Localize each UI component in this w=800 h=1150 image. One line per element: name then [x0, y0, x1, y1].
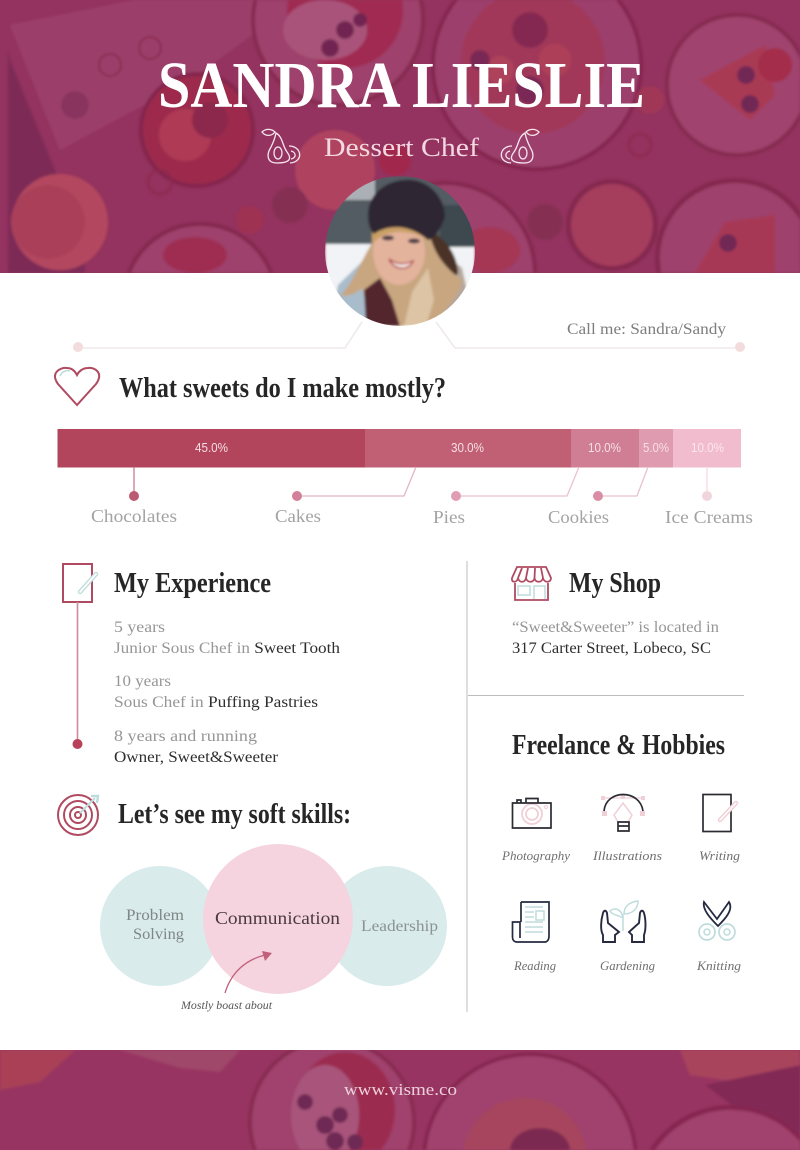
- bar chart legend: Cakes: [275, 506, 321, 526]
- experience list: 5 years: [114, 619, 165, 636]
- experience list: 8 years and running: [114, 728, 257, 745]
- stacked bar chart: 10.0%: [691, 440, 724, 455]
- experience list: [114, 619, 340, 766]
- heading: experience: My Experience: [114, 568, 271, 599]
- bar chart legend: Chocolates: [91, 506, 177, 526]
- icon: shop: [512, 567, 551, 600]
- shop address: “Sweet&Sweeter” is located in: [512, 619, 719, 636]
- stacked bar chart: 45.0%: [195, 440, 228, 455]
- icon: gardening: [601, 901, 646, 942]
- footer photo banner: [0, 1050, 800, 1150]
- soft skills venn: Solving: [133, 926, 184, 943]
- shop address: 317 Carter Street, Lobeco, SC: [512, 640, 711, 657]
- soft skills venn: Communication: [215, 908, 340, 928]
- soft skills venn: Problem: [126, 907, 185, 924]
- hobby labels: Gardening: [600, 958, 655, 973]
- soft skills venn: [100, 844, 447, 994]
- icon: reading: [512, 902, 549, 942]
- shop address: [512, 619, 719, 657]
- icon: left avocado: [262, 129, 300, 163]
- hobby labels: [501, 848, 742, 973]
- icon: heart: [55, 368, 99, 405]
- bar chart legend: Pies: [433, 507, 465, 527]
- heading: hobbies: Freelance & Hobbies: [512, 730, 725, 761]
- call me text: Call me: Sandra/Sandy: [567, 321, 726, 338]
- stacked bar chart: 30.0%: [451, 440, 484, 455]
- icon: right avocado: [501, 129, 539, 163]
- subtitle: Dessert Chef: [324, 133, 479, 162]
- annotation: Mostly boast about: [180, 998, 273, 1012]
- column divider: [467, 561, 744, 1012]
- hobby labels: Illustrations: [592, 848, 662, 863]
- stacked bar chart: [58, 429, 741, 468]
- soft skills venn: Leadership: [361, 918, 438, 935]
- stacked bar chart: 5.0%: [643, 440, 669, 455]
- icon: photography: [512, 798, 551, 828]
- arrow: to communication: [225, 951, 272, 993]
- icon: experience notepad with timeline: [63, 564, 96, 749]
- icon: writing: [703, 794, 736, 832]
- contact connector line: [73, 322, 745, 352]
- icon: knitting: [699, 902, 735, 940]
- heading: soft skills: Let’s see my soft skills:: [118, 799, 351, 830]
- experience list: Junior Sous Chef in Sweet Tooth: [114, 640, 340, 657]
- bar chart legend: Cookies: [548, 507, 609, 527]
- hobby labels: Reading: [513, 958, 556, 973]
- experience list: Owner, Sweet&Sweeter: [114, 749, 279, 766]
- experience list: Sous Chef in Puffing Pastries: [114, 694, 318, 711]
- bar chart legend: Ice Creams: [665, 507, 753, 527]
- footer url: www.visme.co: [344, 1080, 457, 1099]
- heading: shop: My Shop: [569, 568, 661, 599]
- header photo banner: [0, 0, 800, 273]
- hobby labels: Knitting: [696, 958, 742, 973]
- stacked bar chart: 10.0%: [588, 440, 621, 455]
- hobby labels: Writing: [699, 848, 741, 863]
- icon: target: [58, 795, 98, 835]
- experience list: 10 years: [114, 673, 171, 690]
- heading: sweets: What sweets do I make mostly?: [119, 373, 446, 404]
- icon: illustrations: [601, 794, 645, 831]
- bar chart legend: [91, 467, 753, 527]
- title: SANDRA LIESLIE: [158, 49, 645, 122]
- hobby labels: Photography: [501, 848, 570, 863]
- profile photo: [325, 176, 475, 326]
